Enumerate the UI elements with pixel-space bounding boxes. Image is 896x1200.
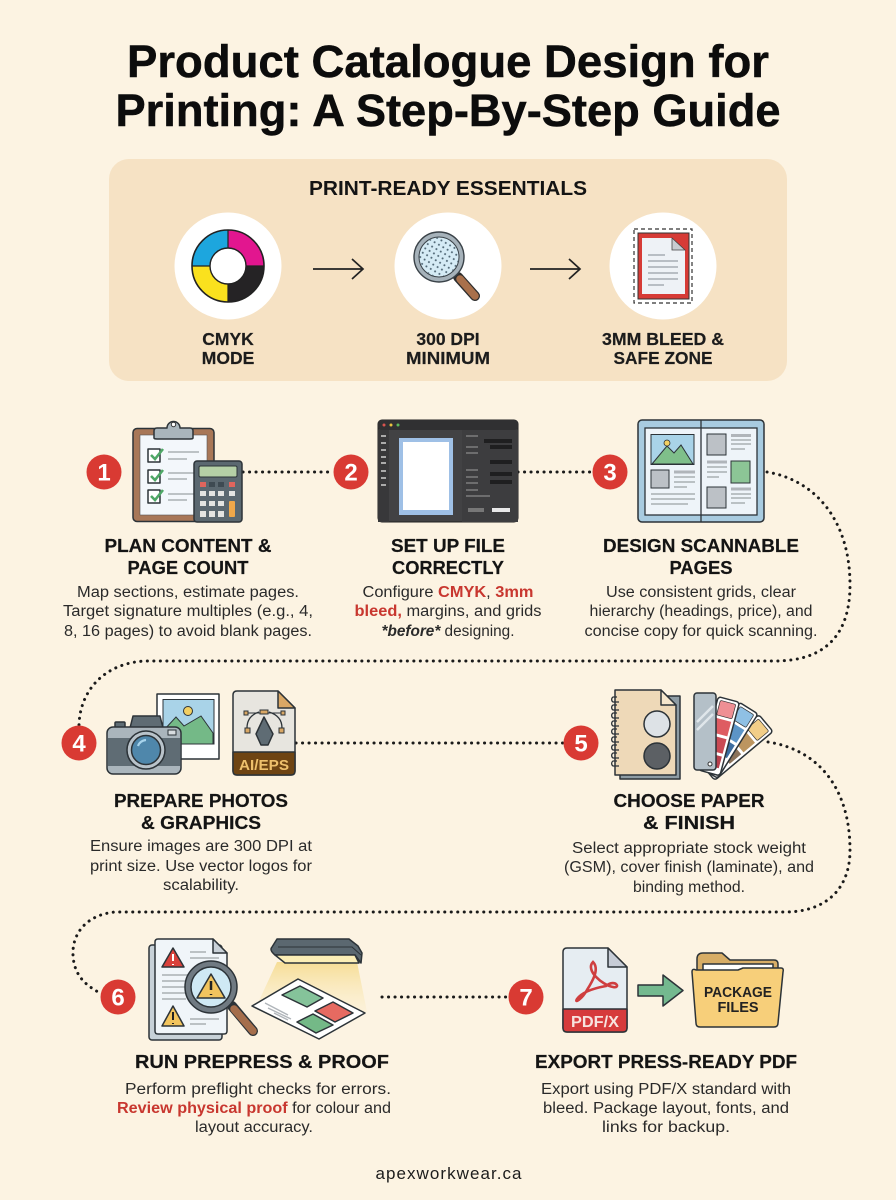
- step 4 description: print size. Use vector logos for: [90, 858, 312, 875]
- step 6 heading: RUN PREPRESS & PROOF: [135, 1052, 389, 1072]
- step 1 description: Map sections, estimate pages.: [77, 584, 299, 601]
- step number 2: [334, 454, 368, 490]
- step 5 description: (GSM), cover finish (laminate), and: [564, 859, 814, 876]
- icon: camera and photo: [107, 691, 295, 775]
- step 1 description: Target signature multiples (e.g., 4,: [63, 603, 313, 620]
- label: 300 DPI minimum: [406, 329, 490, 368]
- icon: PDF/X file: PDF/X: [571, 1014, 619, 1031]
- icon: magnifier 300 DPI: [394, 212, 502, 320]
- step 2 description: Configure CMYK, 3mm: [362, 584, 533, 601]
- icon: camera and photo: AI/EPS: [239, 757, 289, 774]
- arrow: [313, 259, 363, 279]
- title: [116, 36, 780, 136]
- step number 4: [62, 726, 96, 760]
- step 6 description: [117, 1081, 391, 1136]
- icon: open catalogue spread: [638, 420, 764, 522]
- step 5 description: binding method.: [633, 879, 745, 896]
- step 4: prepare photos and graphics: [62, 691, 313, 894]
- step number 3: [592, 454, 628, 490]
- step number 7: [508, 980, 544, 1014]
- step number 2: 2: [344, 460, 358, 486]
- step 2 heading: SET UP FILE: [391, 536, 505, 556]
- label: 300 DPI minimum: MINIMUM: [406, 348, 490, 368]
- step 1 heading: [104, 536, 272, 578]
- step 4 description: [90, 838, 313, 894]
- icon: colour swatch fan: [694, 693, 773, 780]
- icon: package files folder: PACKAGE: [704, 985, 772, 1001]
- step 5 heading: [614, 791, 764, 833]
- step 7 description: Export using PDF/X standard with: [541, 1081, 791, 1098]
- step 5 heading: CHOOSE PAPER: [614, 791, 764, 811]
- icon: light booth and proof sheet: [252, 939, 367, 1039]
- label: CMYK mode: [202, 329, 254, 368]
- step number 6: 6: [111, 984, 125, 1012]
- step number 6: [100, 980, 136, 1014]
- step number 1: 1: [97, 460, 111, 486]
- step 1: plan content and page count: [63, 422, 313, 640]
- step 7 description: [541, 1081, 791, 1136]
- label: 3mm bleed and safe zone: SAFE ZONE: [614, 348, 712, 368]
- step 6 description: Review physical proof for colour and: [117, 1100, 391, 1117]
- icon: package files folder: [692, 953, 783, 1027]
- step 3: design scannable pages: [584, 420, 818, 640]
- step 3 heading: PAGES: [670, 558, 732, 578]
- step 7: export press-ready PDF: [508, 948, 797, 1136]
- step 6 description: Perform preflight checks for errors.: [125, 1081, 391, 1098]
- step 2 description: [354, 584, 542, 640]
- step 5 heading: & FINISH: [643, 813, 735, 833]
- panel: print-ready essentials: [109, 159, 787, 381]
- step 5 description: [564, 840, 814, 896]
- dotted path connecting all steps: [73, 472, 850, 997]
- step 3 description: hierarchy (headings, price), and: [590, 603, 812, 620]
- step 7 description: links for backup.: [602, 1119, 730, 1136]
- step 1 heading: PAGE COUNT: [128, 558, 249, 578]
- arrow: [530, 259, 580, 279]
- footer: website: apexworkwear.ca: [376, 1164, 522, 1183]
- step number 4: 4: [72, 730, 86, 758]
- step 5 description: Select appropriate stock weight: [572, 840, 807, 857]
- step 4 description: scalability.: [163, 877, 239, 894]
- step 3 description: Use consistent grids, clear: [606, 584, 796, 601]
- step number 5: 5: [574, 730, 588, 758]
- label: CMYK mode: MODE: [202, 348, 254, 368]
- step 1 heading: PLAN CONTENT &: [104, 536, 272, 556]
- step 2 description: bleed, margins, and grids: [354, 603, 542, 620]
- step 4 heading: [114, 791, 288, 833]
- step 6: run prepress and proof: [100, 939, 391, 1136]
- step 4 description: Ensure images are 300 DPI at: [90, 838, 313, 855]
- step 6 description: layout accuracy.: [195, 1119, 313, 1136]
- label: CMYK mode: CMYK: [202, 329, 254, 349]
- step 2 heading: [391, 536, 505, 578]
- step number 1: [86, 454, 122, 490]
- icon: bleed and safe zone page: [610, 212, 716, 320]
- step number 7: 7: [519, 984, 533, 1012]
- step 3 description: [584, 584, 818, 640]
- step number 5: [564, 726, 598, 760]
- step 4 heading: PREPARE PHOTOS: [114, 791, 288, 811]
- step 2: set up file correctly: [334, 420, 542, 640]
- label: 300 DPI minimum: 300 DPI: [416, 329, 480, 349]
- icon: clipboard and calculator: [133, 422, 242, 522]
- step 3 heading: DESIGN SCANNABLE: [603, 536, 799, 556]
- title: Printing: A Step-By-Step Guide: [116, 85, 780, 136]
- icon: CMYK colour wheel: [174, 212, 282, 320]
- step 5: choose paper and finish: [564, 690, 814, 896]
- icon: design software window: [378, 420, 518, 522]
- icon: paper samples notebook: [612, 690, 680, 779]
- step 3 description: concise copy for quick scanning.: [584, 623, 818, 640]
- step 2 heading: CORRECTLY: [392, 558, 504, 578]
- icon: package files folder: FILES: [717, 1000, 759, 1016]
- arrow: to package files: [638, 975, 683, 1006]
- step 1 description: 8, 16 pages) to avoid blank pages.: [64, 623, 312, 640]
- step 2 description: *before* designing.: [382, 623, 514, 640]
- step 7 heading: EXPORT PRESS-READY PDF: [535, 1052, 797, 1072]
- label: 3mm bleed and safe zone: 3MM BLEED &: [602, 329, 724, 349]
- step 1 description: [63, 584, 313, 640]
- step 3 heading: [603, 536, 799, 578]
- icon: preflight document and magnifier: [149, 939, 253, 1040]
- panel heading: PRINT-READY ESSENTIALS: [309, 178, 587, 200]
- icon: PDF/X file: [563, 948, 627, 1032]
- step 7 description: bleed. Package layout, fonts, and: [543, 1100, 789, 1117]
- title: Product Catalogue Design for: [127, 36, 769, 87]
- label: 3mm bleed and safe zone: [602, 329, 724, 368]
- step number 3: 3: [603, 460, 617, 486]
- step 4 heading: & GRAPHICS: [141, 813, 261, 833]
